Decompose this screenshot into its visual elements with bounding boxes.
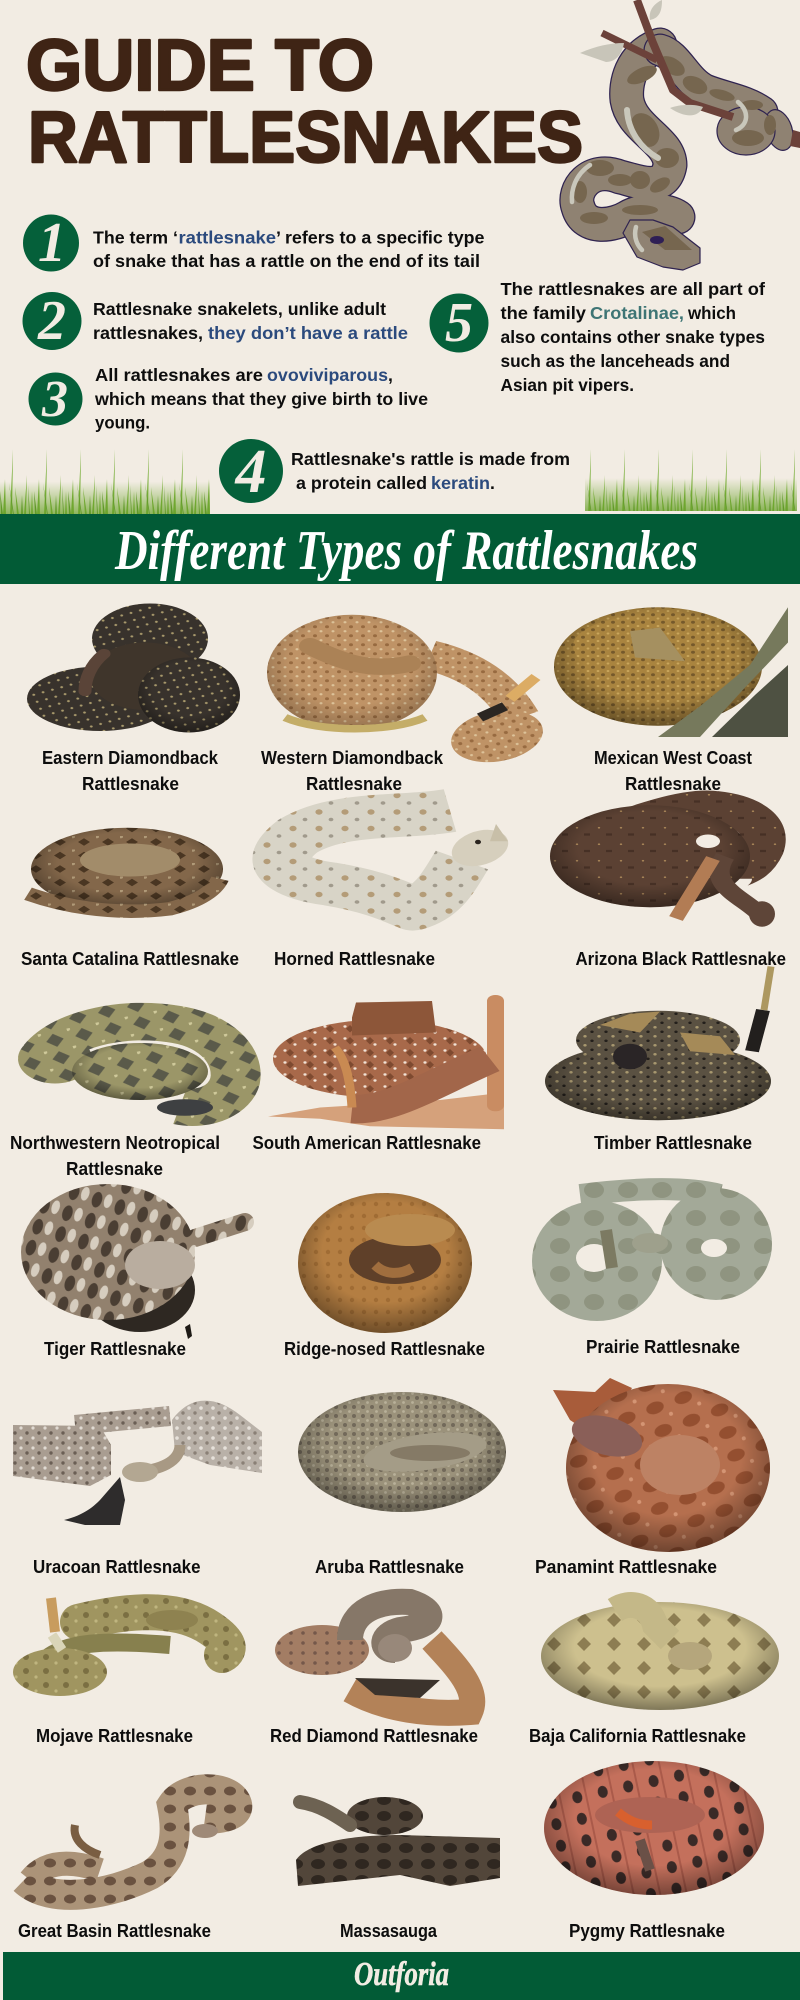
label: Mexican West Coast: Rattlesnake bbox=[625, 774, 721, 794]
number badge 2: 2 bbox=[37, 290, 66, 352]
fact 2: they don’t have a rattle bbox=[208, 323, 408, 343]
fact 3: , bbox=[388, 365, 393, 385]
illustration: snake hanging on branch bbox=[572, 0, 800, 270]
label: Massasauga: Massasauga bbox=[340, 1921, 438, 1941]
fact 4: . bbox=[490, 473, 495, 493]
label: Pygmy: Pygmy Rattlesnake bbox=[569, 1921, 725, 1941]
fact 4: a protein called bbox=[296, 473, 427, 493]
title: RATTLESNAKES bbox=[28, 98, 583, 178]
snake: Mexican West Coast bbox=[554, 607, 788, 737]
fact 1: rattlesnake bbox=[178, 228, 276, 248]
number badge 3: 3 bbox=[41, 371, 68, 428]
number badge 3 bbox=[28, 371, 82, 428]
snake: Baja California bbox=[541, 1602, 779, 1710]
label: Panamint: Panamint Rattlesnake bbox=[535, 1557, 717, 1577]
snake: Uracoan bbox=[13, 1401, 262, 1525]
title bbox=[26, 26, 583, 178]
fact 2: Rattlesnake snakelets, unlike adult bbox=[93, 299, 386, 319]
fact 2 bbox=[22, 290, 408, 352]
snake: Mojave bbox=[13, 1598, 228, 1696]
fact 4: keratin bbox=[431, 473, 490, 493]
fact 5: the family bbox=[500, 303, 586, 323]
label: Tiger: Tiger Rattlesnake bbox=[44, 1339, 186, 1359]
label: Northwestern Neotropical: Northwestern Neotropical bbox=[10, 1133, 220, 1153]
fact 1 bbox=[23, 212, 485, 274]
snake: Pygmy bbox=[544, 1761, 764, 1895]
fact 5: Asian pit vipers. bbox=[500, 375, 634, 395]
fact 2: rattlesnakes, bbox=[93, 323, 203, 343]
snake: Tiger bbox=[21, 1184, 245, 1339]
snake: South American bbox=[268, 995, 504, 1129]
number badge 5: 5 bbox=[445, 292, 473, 354]
fact 5: also contains other snake types bbox=[500, 327, 765, 347]
label: Northwestern Neotropical: Rattlesnake bbox=[66, 1159, 163, 1179]
number badge 1 bbox=[23, 212, 79, 274]
label: Baja California: Baja California Rattlesnake bbox=[529, 1726, 746, 1746]
snake: Arizona Black bbox=[550, 805, 775, 927]
label: Western Diamondback: Western Diamondback bbox=[261, 748, 444, 768]
label: Ridge-nosed: Ridge-nosed Rattlesnake bbox=[284, 1339, 485, 1359]
snake: Horned bbox=[281, 810, 517, 909]
fact 3: young. bbox=[95, 412, 150, 432]
fact 5: Crotalinae, bbox=[590, 303, 684, 323]
snake: Prairie bbox=[532, 1188, 772, 1321]
label: Red Diamond: Red Diamond Rattlesnake bbox=[270, 1726, 478, 1746]
fact 4 bbox=[219, 438, 570, 506]
snake: Massasauga bbox=[296, 1797, 500, 1886]
label: Horned: Horned Rattlesnake bbox=[274, 949, 435, 969]
snake: Santa Catalina bbox=[28, 828, 223, 911]
label: Eastern Diamondback bbox=[42, 748, 219, 794]
label: Mexican West Coast bbox=[594, 748, 752, 794]
label: Eastern Diamondback: Rattlesnake bbox=[82, 774, 179, 794]
number badge 4: 4 bbox=[234, 438, 266, 506]
number badge 1: 1 bbox=[38, 212, 66, 274]
logo: Outforia bbox=[354, 1956, 449, 1993]
fact 1: The term ‘ bbox=[93, 228, 178, 248]
label: Northwestern Neotropical bbox=[10, 1133, 220, 1179]
fact 3: All rattlesnakes are bbox=[95, 365, 263, 385]
fact 3 bbox=[28, 365, 428, 432]
number badge 5 bbox=[430, 292, 488, 354]
fact 5: which bbox=[687, 303, 736, 323]
fact 5: The rattlesnakes are all part of bbox=[500, 279, 765, 299]
snake: Timber bbox=[545, 966, 771, 1120]
label: Timber: Timber Rattlesnake bbox=[594, 1133, 752, 1153]
label: Arizona Black: Arizona Black Rattlesnake bbox=[576, 949, 786, 969]
grass left bbox=[0, 448, 210, 515]
fact 3: ovoviviparous bbox=[267, 365, 388, 385]
snake: Western Diamondback bbox=[267, 615, 552, 771]
snake: Aruba bbox=[298, 1392, 506, 1512]
label: South American: South American Rattlesnake bbox=[252, 1133, 481, 1153]
footer bbox=[3, 1952, 800, 2000]
label: Great Basin: Great Basin Rattlesnake bbox=[18, 1921, 211, 1941]
fact 4: Rattlesnake's rattle is made from bbox=[291, 449, 570, 469]
snake: Ridge-nosed bbox=[298, 1193, 472, 1333]
number badge 4 bbox=[219, 438, 283, 506]
fact 5: such as the lanceheads and bbox=[500, 351, 730, 371]
label: Aruba: Aruba Rattlesnake bbox=[315, 1557, 464, 1577]
label: Uracoan: Uracoan Rattlesnake bbox=[33, 1557, 200, 1577]
fact 1: of snake that has a rattle on the end of its tail bbox=[93, 251, 480, 271]
label: Eastern Diamondback: Eastern Diamondback bbox=[42, 748, 219, 768]
fact 3: which means that they give birth to live bbox=[94, 389, 428, 409]
label: Mojave: Mojave Rattlesnake bbox=[36, 1726, 193, 1746]
number badge 2 bbox=[22, 290, 82, 352]
snake: Eastern Diamondback bbox=[27, 604, 240, 732]
fact 1: ’ refers to a specific type bbox=[276, 228, 485, 248]
grass right bbox=[585, 445, 797, 511]
snake: Great Basin bbox=[24, 1789, 237, 1895]
label: Mexican West Coast: Mexican West Coast bbox=[594, 748, 752, 768]
snake: Panamint bbox=[553, 1378, 770, 1552]
fact 5 bbox=[430, 279, 765, 395]
label: Prairie: Prairie Rattlesnake bbox=[586, 1337, 740, 1357]
label: Western Diamondback bbox=[261, 748, 444, 794]
title: GUIDE TO bbox=[26, 26, 374, 106]
label: Santa Catalina: Santa Catalina Rattlesnake bbox=[21, 949, 239, 969]
snake: Red Diamond bbox=[275, 1602, 472, 1713]
label: Western Diamondback: Rattlesnake bbox=[306, 774, 402, 794]
snake: Northwestern Neotropical bbox=[18, 1022, 236, 1116]
